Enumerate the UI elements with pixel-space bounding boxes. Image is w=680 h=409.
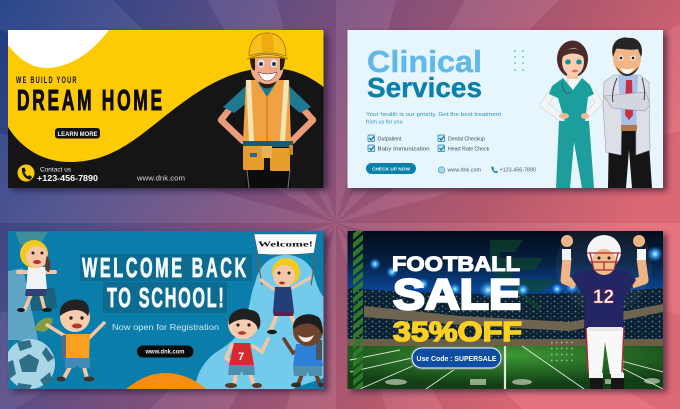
contact text (37, 167, 98, 181)
checklist: Dental Checkup (448, 136, 485, 142)
illustration: soccer ball (5, 339, 55, 389)
button: learn more: LEARN MORE (58, 132, 98, 138)
tagline: from us for you (366, 120, 403, 126)
subheading: Now open for Registration (112, 323, 219, 332)
button: learn more (55, 128, 100, 138)
illustration: doctor (603, 38, 652, 188)
heading: sale: SALE (393, 271, 521, 319)
illustration: girl holding welcome banner (254, 234, 317, 334)
left green diagonal stripes (353, 231, 363, 389)
heading: dream home: DREAM HOME (17, 85, 165, 117)
checklist: Outpatient (378, 136, 402, 142)
panel: football sale banner (348, 217, 663, 389)
banner: welcome: Welcome! (258, 240, 313, 248)
button: use code: Use Code : SUPERSALE (416, 354, 496, 363)
button: website: www.dnk.com (145, 350, 184, 356)
checklist (368, 135, 490, 152)
illustration: boy in red shirt (225, 309, 268, 388)
football field (348, 346, 663, 389)
website with globe icon: www.dnk.com (448, 168, 481, 174)
illustration: nurse (544, 40, 599, 188)
heading: football: FOOTBALL (392, 253, 520, 276)
heading: clinical: Clinical (367, 44, 482, 79)
heading: to school: TO SCHOOL! (107, 281, 225, 313)
stadium crowd (348, 288, 663, 347)
phone number with icon: +123-456-7890 (500, 168, 536, 174)
dots on field (551, 342, 573, 360)
illustration: boy in red shirt: 7 (238, 351, 244, 363)
light blue blob (195, 255, 324, 389)
heading: welcome back: WELCOME BACK (82, 251, 249, 283)
contact text: Contact us (40, 166, 72, 174)
decorative dots (514, 50, 524, 71)
website with globe icon (438, 167, 481, 174)
heading: 35% off: 35%OFF (393, 316, 522, 347)
faint logo (490, 240, 560, 312)
illustration: child in orange shirt (47, 300, 104, 382)
tagline: Your health is our priority. Get the best treatment (366, 112, 502, 118)
button: use code (410, 346, 503, 370)
tagline (366, 112, 502, 126)
checklist: Heart Rate Check (448, 146, 490, 152)
button: website (137, 346, 194, 358)
left decorative shapes (8, 232, 57, 340)
button: check up now (366, 163, 416, 174)
button: check up now: CHECK UP NOW (372, 166, 410, 172)
heading: we build your: WE BUILD YOUR (16, 75, 78, 85)
orange semicircle (126, 373, 206, 389)
illustration: football player (556, 217, 652, 389)
contact text: +123-456-7890 (37, 174, 99, 183)
panel: dream home construction banner (8, 30, 324, 188)
illustration: boy in blue shirt (284, 314, 324, 388)
illustration: football player: 12 (593, 287, 614, 308)
checklist: Baby Immunization (378, 146, 430, 152)
panel: clinical services banner (348, 30, 663, 188)
illustration: child with thumbs up (17, 240, 55, 312)
hard hat (249, 33, 286, 56)
illustration: construction worker (221, 33, 313, 188)
phone number with icon (491, 166, 536, 174)
icon: phone (18, 164, 34, 182)
panel: back to school banner (5, 231, 324, 389)
stadium lights (369, 246, 663, 299)
website: www.dnk.com (136, 176, 185, 182)
heading: services: Services (367, 72, 482, 103)
